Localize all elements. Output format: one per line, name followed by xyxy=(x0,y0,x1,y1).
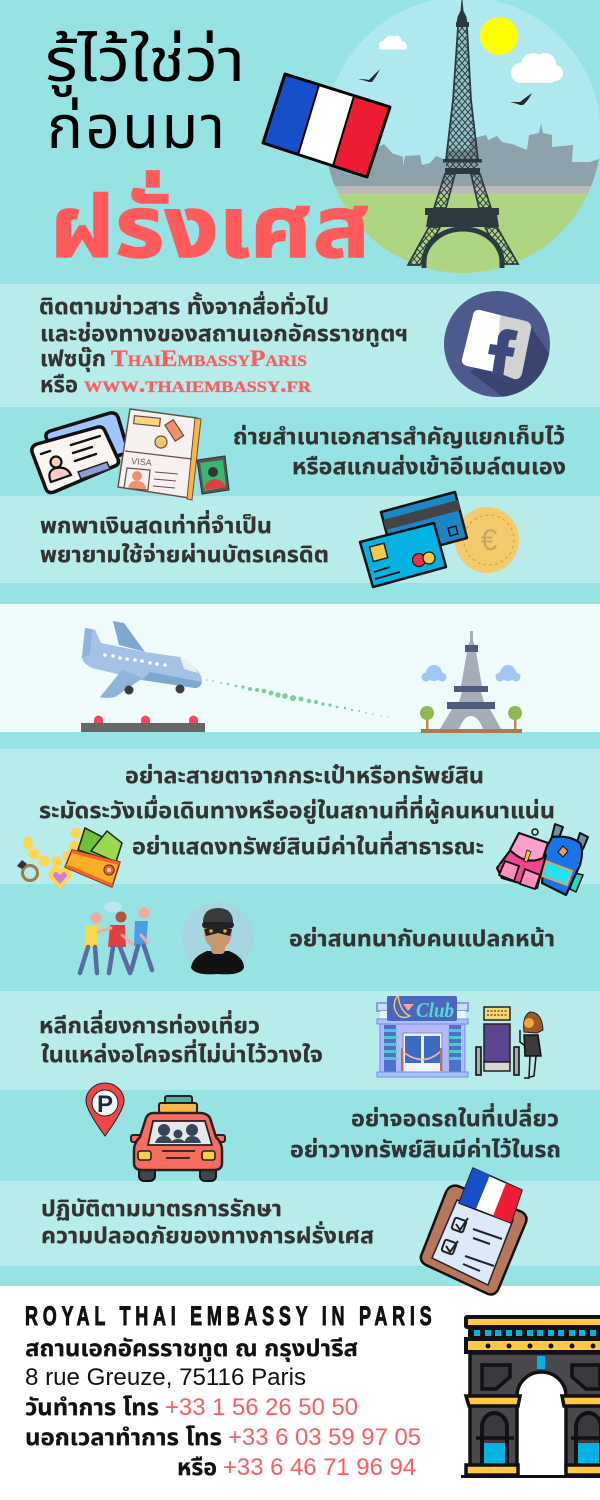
icon: euro coin xyxy=(455,507,519,573)
text block: copy documents: หรือสแกนส่งเข้าอีเมล์ตนเอง xyxy=(292,454,566,479)
icon: big cloud xyxy=(511,53,563,83)
title: รู้ไว้ใช่ว่า xyxy=(45,27,245,97)
icon: bird left xyxy=(358,69,380,82)
text block: follow news: และช่องทางของสถานเอกอัครราชทูตฯ xyxy=(40,321,408,347)
text block: belongings warnings: ระมัดระวังเมื่อเดินทางหรืออยู่ในสถานที่ที่ผู้คนหนาแน่น xyxy=(39,795,555,824)
icon: bird right xyxy=(510,93,532,105)
icon: sun xyxy=(480,17,518,55)
icon: credit cards and coin xyxy=(360,492,519,587)
title: ฝรั่งเศส xyxy=(50,170,370,276)
icon: airplane xyxy=(82,621,202,698)
panel: follow news band xyxy=(0,284,600,407)
icon: car with luggage xyxy=(131,1096,225,1181)
panel: cash band xyxy=(0,496,600,583)
icon: backpacks xyxy=(497,824,588,895)
text block: embassy contact: วันทำการ โทร xyxy=(25,1394,159,1420)
mini Eiffel tower xyxy=(420,631,522,733)
text block: follow news: www.thaiembassy.fr xyxy=(84,372,312,397)
icon: necklace xyxy=(23,828,82,888)
icon: door and doorman xyxy=(476,1007,543,1078)
text block: copy documents xyxy=(233,424,566,479)
text block: follow news: ThaiEmbassyParis xyxy=(111,346,307,371)
icon: euro coin: € xyxy=(481,524,498,557)
text block: parking warnings xyxy=(290,1103,561,1162)
panel: spacer band xyxy=(0,732,600,749)
panel: spacer band xyxy=(0,583,600,604)
text block: avoid red light districts xyxy=(39,1010,323,1067)
text block: follow news: ติดตามข่าวสาร ทั้งจากสื่อทั่วไป xyxy=(39,291,329,319)
text block: embassy contact: +33 1 56 26 50 50 xyxy=(165,1394,358,1421)
text block: embassy contact: นอกเวลาทำการ โทร xyxy=(25,1424,222,1450)
icon: jewellery and wallet xyxy=(17,828,122,888)
icon: club building: Club xyxy=(416,998,454,1022)
icon: group of people xyxy=(80,902,152,973)
icon: ring xyxy=(17,860,38,880)
title xyxy=(45,27,370,276)
text block: carry cash: พยายามใช้จ่ายผ่านบัตรเครดิต xyxy=(40,542,329,567)
icon: photo xyxy=(197,456,229,494)
icon: Eiffel tower xyxy=(408,0,518,268)
panel: plane band xyxy=(0,604,600,732)
runway xyxy=(81,716,205,732)
panel: header background xyxy=(0,0,600,284)
text block: avoid red light districts: หลีกเลี่ยงการท่องเที่ยว xyxy=(39,1010,260,1038)
icon: parking pin: P xyxy=(97,1091,113,1118)
text block: embassy contact: +33 6 03 59 97 05 xyxy=(228,1424,421,1451)
text block: follow news: เฟซบุ๊ก xyxy=(40,346,106,372)
icon: passport: VISA xyxy=(131,456,152,468)
icon: wallet xyxy=(65,828,122,887)
text block: follow news: หรือ xyxy=(40,372,78,397)
icon: passport xyxy=(118,409,201,500)
text block: carry cash: พกพาเงินสดเท่าที่จำเป็น xyxy=(40,510,272,538)
icon: pink backpack xyxy=(497,833,548,889)
icon: ID cards, passport and photo xyxy=(32,409,229,500)
text block: embassy contact: +33 6 46 71 96 94 xyxy=(223,1454,416,1481)
heading: embassy name: ROYAL THAI EMBASSY IN PARIS xyxy=(25,1300,432,1331)
text block: embassy contact: สถานเอกอัครราชทูต ณ กรุงปารีส xyxy=(25,1335,358,1362)
icon: masked thief xyxy=(182,902,254,974)
title: ก่อนมา xyxy=(47,94,225,161)
icon: Arc de Triomphe xyxy=(461,1317,600,1478)
text block: embassy contact xyxy=(25,1300,432,1481)
text block: parking warnings: อย่าจอดรถในที่เปลี่ยว xyxy=(351,1103,559,1131)
icon: checklist clipboard with flag xyxy=(421,1168,526,1294)
icon: blue backpack xyxy=(532,824,588,895)
panel: spacer band xyxy=(0,1266,600,1286)
icon: ID cards xyxy=(32,413,128,493)
text block: embassy contact: 8 rue Greuze, 75116 Paris xyxy=(25,1364,306,1391)
panel: parking band xyxy=(0,1090,600,1181)
flight path dots xyxy=(206,679,389,718)
panel: strangers band xyxy=(0,884,600,991)
text block: follow safety measures: ปฏิบัติตามมาตรการรักษา xyxy=(41,1196,282,1221)
icon: parking pin xyxy=(86,1083,124,1136)
text block: no strangers: อย่าสนทนากับคนแปลกหน้า xyxy=(289,926,555,951)
icon: French flag xyxy=(263,74,390,177)
text block: follow news xyxy=(39,291,408,397)
icon: Facebook badge xyxy=(444,291,550,397)
text block: belongings warnings: อย่าละสายตาจากกระเป๋าหรือทรัพย์สิน xyxy=(125,763,484,788)
text block: copy documents: ถ่ายสำเนาเอกสารสำคัญแยกเก็บไว้ xyxy=(233,424,565,449)
text block: follow safety measures xyxy=(41,1196,374,1248)
illustration: plane taking off xyxy=(81,621,522,733)
text block: belongings warnings xyxy=(39,763,555,859)
text block: carry cash xyxy=(40,510,329,567)
icon: club building xyxy=(377,995,468,1077)
icon: small cloud xyxy=(380,36,406,49)
panel: safety measures band xyxy=(0,1181,600,1266)
text block: embassy contact: หรือ xyxy=(177,1454,217,1480)
text block: avoid red light districts: ในแหล่งอโคจรที่ไม่น่าไว้วางใจ xyxy=(41,1039,323,1067)
text block: belongings warnings: อย่าแสดงทรัพย์สินมีค่าในที่สาธารณะ xyxy=(132,831,484,859)
panel: documents band xyxy=(0,407,600,496)
illustration: Paris scene with Eiffel tower xyxy=(320,0,600,278)
text block: follow safety measures: ความปลอดภัยของทางการฝรั่งเศส xyxy=(41,1221,374,1248)
panel: nightlife band xyxy=(0,991,600,1090)
text block: parking warnings: อย่าวางทรัพย์สินมีค่าไว้ในรถ xyxy=(290,1137,561,1162)
panel: belongings band xyxy=(0,749,600,884)
